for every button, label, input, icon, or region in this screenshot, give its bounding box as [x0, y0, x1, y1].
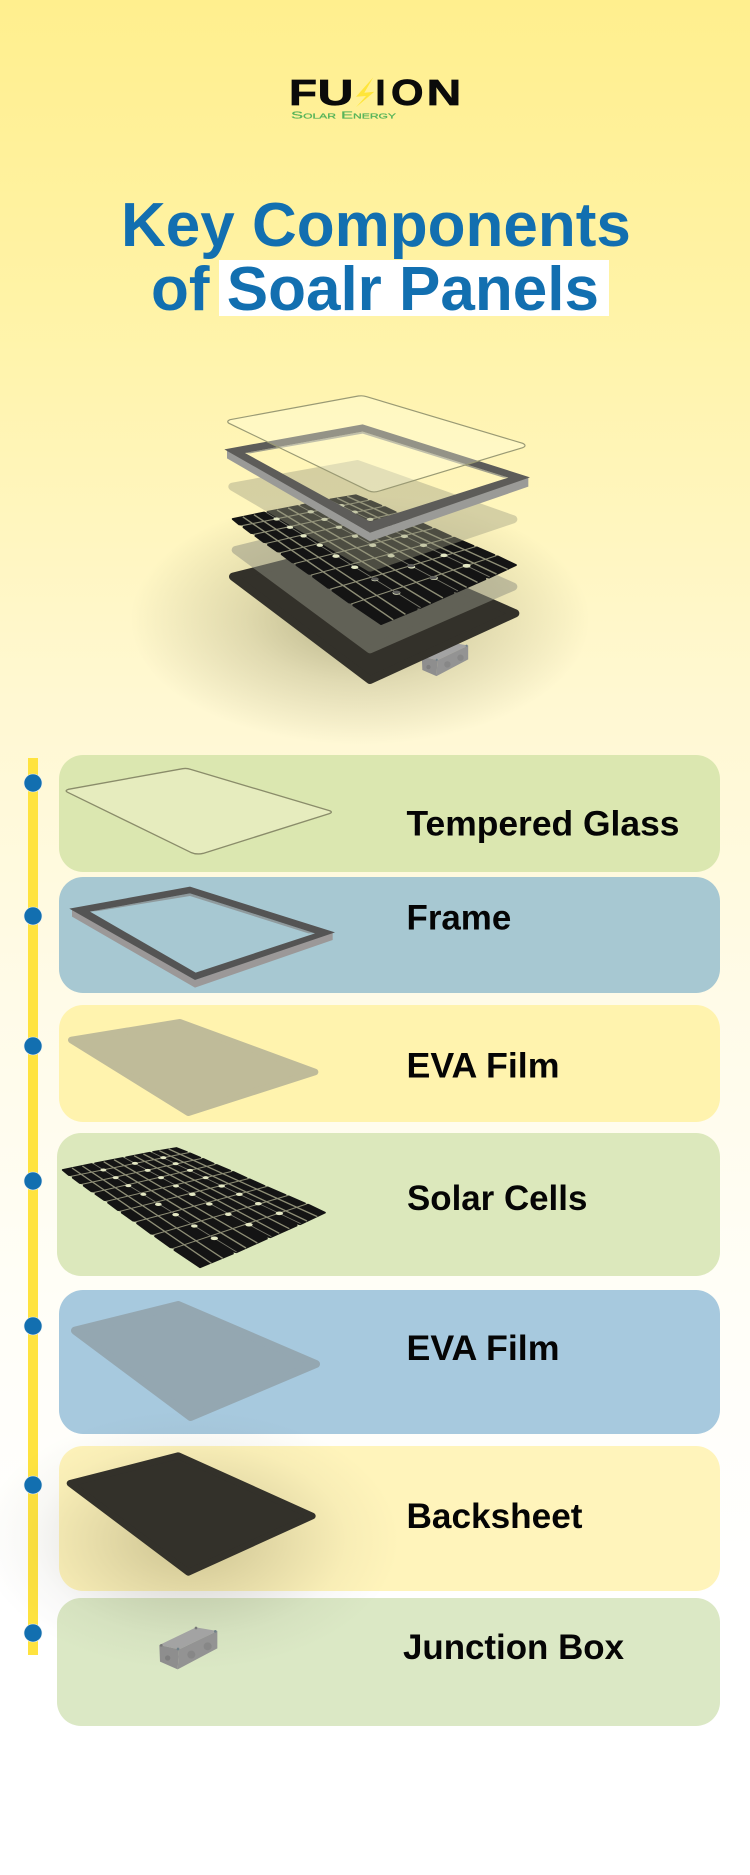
dots over dark backsheet [371, 564, 437, 594]
logo: F [289, 72, 317, 113]
label: EVA film 2: EVA Film [406, 1329, 560, 1368]
title [121, 191, 631, 324]
icon: backsheet [70, 1456, 312, 1572]
junction box under panel [422, 642, 468, 676]
lower EVA film layer [236, 519, 513, 649]
icon: junction box [159, 1627, 217, 1669]
icon: tempered glass sheet [66, 768, 331, 854]
frame layer [224, 424, 530, 541]
panel: EVA film 2 [59, 1290, 720, 1434]
label: backsheet: Backsheet [406, 1497, 583, 1536]
logo: I [376, 72, 386, 113]
logo: U [318, 72, 354, 113]
label: tempered glass: Tempered Glass [406, 804, 680, 844]
label: junction box: Junction Box [403, 1628, 625, 1667]
logo: N [427, 72, 461, 113]
label: frame: Frame [406, 898, 511, 938]
backsheet drop shadow [0, 1410, 400, 1670]
logo: Solar Energy [291, 109, 397, 121]
panel: backsheet [59, 1446, 720, 1591]
logo [289, 72, 461, 121]
title: of Soalr Panels [151, 255, 599, 324]
timeline dots [24, 774, 42, 1642]
icon: EVA film sheet [71, 1022, 315, 1113]
logo: O [391, 72, 424, 113]
icon: frame [69, 887, 335, 988]
panel: solar cells [57, 1133, 720, 1276]
tempered glass layer [228, 396, 525, 492]
panel: EVA film [59, 1005, 720, 1122]
backsheet layer [233, 545, 515, 680]
timeline bar [28, 758, 38, 1655]
label: EVA film: EVA Film [406, 1046, 560, 1086]
panel: junction box [57, 1598, 720, 1726]
solar cells layer [233, 495, 516, 624]
panel: frame [59, 877, 720, 993]
exploded solar panel illustration [130, 396, 590, 745]
label: solar cells: Solar Cells [407, 1179, 587, 1218]
upper EVA film layer [232, 464, 513, 568]
icon: EVA film sheet 2 [75, 1305, 316, 1417]
panel: tempered glass [59, 755, 720, 872]
icon: lightning bolt [356, 77, 374, 107]
title: Key Components [121, 191, 631, 260]
icon: solar cells [63, 1148, 325, 1267]
